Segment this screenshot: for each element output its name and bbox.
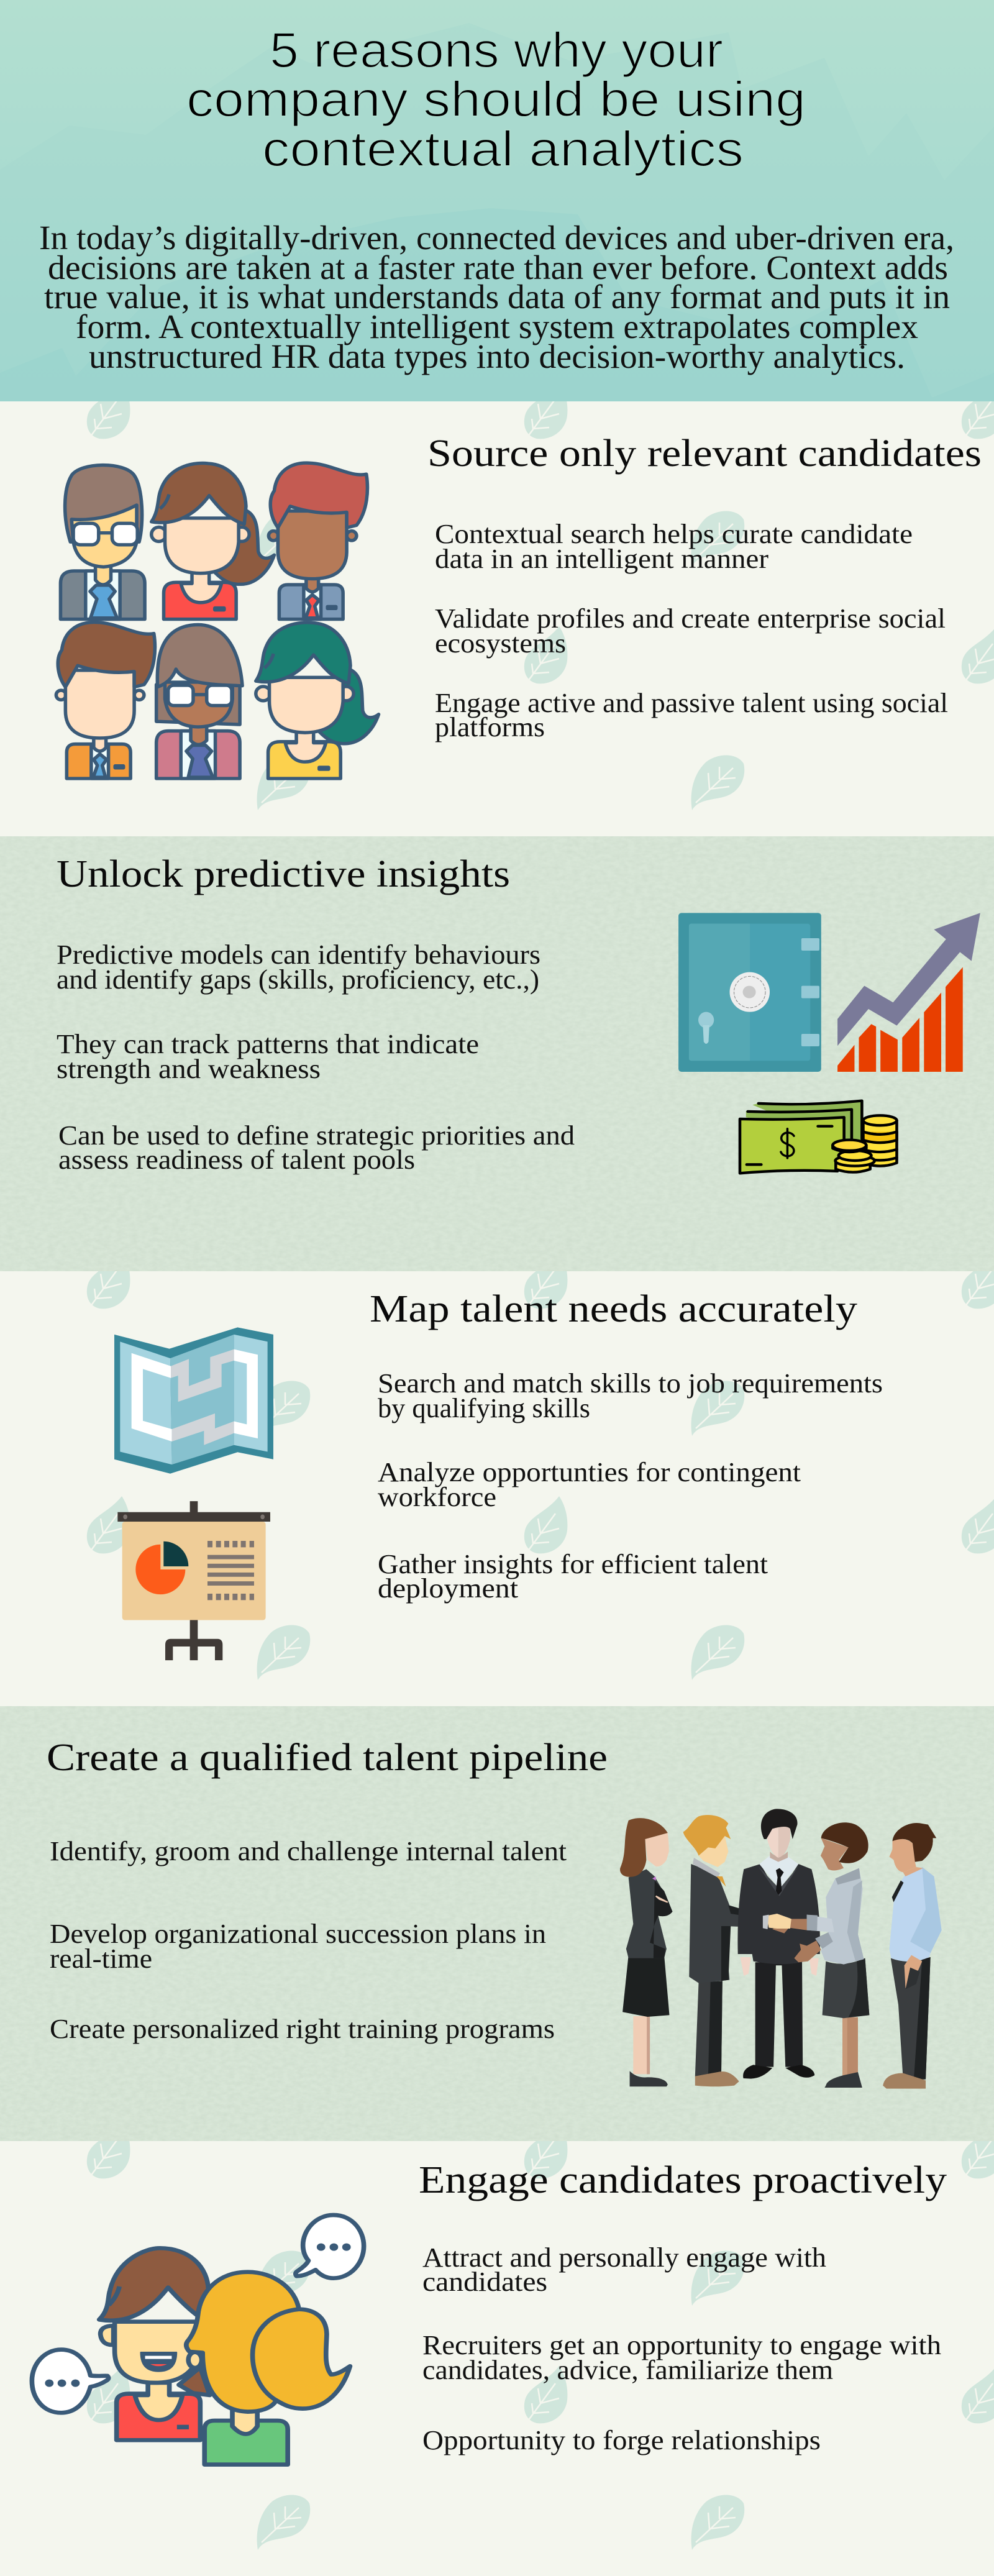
icon: folded map bbox=[114, 1327, 273, 1474]
bullet list: ecosystems bbox=[435, 628, 566, 659]
title bbox=[186, 22, 806, 176]
panel: header bbox=[0, 0, 994, 401]
heading: Engage candidates proactively bbox=[419, 2159, 947, 2201]
bullet list: Can be used to define strategic priorities and bbox=[58, 1120, 575, 1151]
panel: unlock predictive insights bbox=[0, 836, 994, 1271]
avatar: man with brown hair bbox=[56, 622, 155, 779]
figure: woman in grey blouse bbox=[794, 1822, 869, 2088]
bullet list: deployment bbox=[378, 1573, 518, 1604]
title: company should be using bbox=[186, 71, 806, 127]
icon: banknotes and coins bbox=[740, 1101, 896, 1173]
avatar: man with red hair bbox=[268, 463, 367, 619]
bullet list bbox=[422, 2242, 941, 2455]
bullet list bbox=[50, 1836, 567, 2044]
icon: presentation board with pie chart bbox=[117, 1501, 270, 1660]
panel: source only relevant candidates bbox=[56, 432, 982, 779]
bullet list: Recruiters get an opportunity to engage with bbox=[422, 2330, 941, 2360]
illustration: two people talking bbox=[32, 2215, 364, 2465]
icon: growth arrow and bars bbox=[837, 913, 980, 1072]
bullet list: candidates bbox=[422, 2267, 547, 2297]
bullet list: Contextual search helps curate candidate bbox=[435, 519, 913, 549]
heading: Create a qualified talent pipeline bbox=[47, 1737, 608, 1779]
avatar: woman with glasses bbox=[157, 624, 242, 779]
bullet list: data in an intelligent manner bbox=[435, 544, 768, 574]
bullet list: platforms bbox=[435, 712, 545, 742]
panel: map talent needs accurately bbox=[114, 1288, 883, 1660]
bullet list bbox=[435, 519, 948, 742]
icon: six candidate avatars bbox=[56, 463, 378, 779]
heading: Map talent needs accurately bbox=[370, 1288, 857, 1330]
bullet list: assess readiness of talent pools bbox=[58, 1144, 415, 1175]
bullet list: Analyze opportunties for contingent bbox=[378, 1457, 801, 1487]
bullet list: Create personalized right training programs bbox=[50, 2014, 555, 2044]
figure: woman with brown hair, smiling bbox=[99, 2248, 210, 2440]
panel: engage candidates proactively bbox=[32, 2159, 947, 2465]
icon: safe bbox=[678, 913, 821, 1072]
bullet list: Validate profiles and create enterprise social bbox=[435, 603, 946, 634]
intro paragraph bbox=[39, 219, 954, 375]
heading: Unlock predictive insights bbox=[57, 853, 510, 895]
bullet list: Engage active and passive talent using social bbox=[435, 688, 948, 718]
bullet list: by qualifying skills bbox=[378, 1393, 590, 1423]
bullet list: real-time bbox=[50, 1943, 152, 1974]
bullet list: strength and weakness bbox=[57, 1054, 321, 1084]
intro paragraph: form. A contextually intelligent system extrapolates complex bbox=[76, 308, 918, 345]
avatar: man with glasses bbox=[60, 465, 145, 619]
bullet list: Opportunity to forge relationships bbox=[422, 2425, 821, 2455]
intro paragraph: unstructured HR data types into decision-worthy analytics. bbox=[89, 337, 905, 375]
icon: speech bubble right bbox=[296, 2215, 364, 2278]
illustration: business people shaking hands bbox=[620, 1809, 942, 2089]
avatar: woman with teal ponytail bbox=[256, 623, 378, 779]
bullet list: Attract and personally engage with bbox=[422, 2242, 826, 2273]
heading: Source only relevant candidates bbox=[427, 432, 982, 475]
bullet list: workforce bbox=[378, 1482, 496, 1512]
figure: man in blue shirt bbox=[883, 1823, 942, 2089]
intro paragraph: decisions are taken at a faster rate than ever before. Context adds bbox=[48, 249, 948, 286]
bullet list: Predictive models can identify behaviours bbox=[57, 939, 540, 970]
bullet list: Develop organizational succession plans in bbox=[50, 1919, 546, 1949]
bullet list: Identify, groom and challenge internal talent bbox=[50, 1836, 567, 1866]
figure: blond man in suit bbox=[683, 1815, 767, 2086]
icons: map and presentation board bbox=[114, 1327, 273, 1660]
panel: create a qualified talent pipeline bbox=[0, 1706, 994, 2141]
bullet list: candidates, advice, familiarize them bbox=[422, 2355, 833, 2385]
icon: speech bubble left bbox=[32, 2350, 109, 2413]
figure: woman with yellow hair, from behind bbox=[186, 2272, 350, 2465]
bullet list: They can track patterns that indicate bbox=[57, 1029, 479, 1059]
avatar: woman with brown ponytail bbox=[152, 463, 274, 619]
icons: safe, growth chart, money bbox=[678, 913, 980, 1173]
bullet list bbox=[378, 1368, 883, 1604]
figure: woman with arms crossed bbox=[620, 1818, 672, 2086]
title: 5 reasons why your bbox=[270, 22, 723, 78]
handshake bbox=[763, 1914, 807, 1934]
title: contextual analytics bbox=[262, 121, 744, 176]
figure: man in black suit bbox=[737, 1809, 820, 2079]
bullet list: and identify gaps (skills, proficiency, etc.,) bbox=[57, 964, 539, 995]
intro paragraph: In today’s digitally-driven, connected devices and uber-driven era, bbox=[39, 219, 954, 257]
bullet list: Search and match skills to job requirements bbox=[378, 1368, 883, 1399]
intro paragraph: true value, it is what understands data of any format and puts it in bbox=[44, 278, 950, 316]
bullet list: Gather insights for efficient talent bbox=[378, 1549, 768, 1579]
bullet list bbox=[57, 939, 575, 1175]
